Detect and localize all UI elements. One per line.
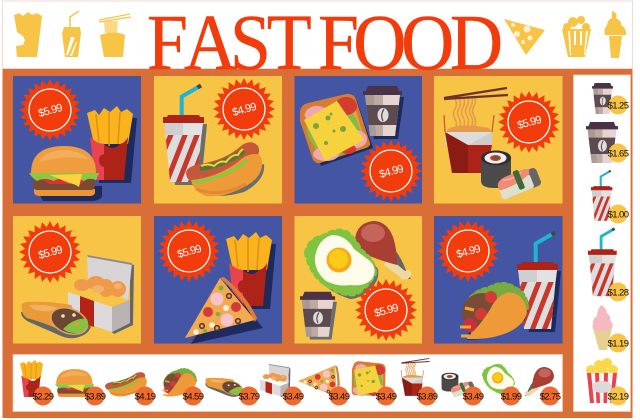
price: large drink: $1.28: [608, 288, 629, 298]
large coffee: [586, 122, 620, 165]
panel: noodles and sushi: [434, 76, 562, 204]
panel: burger and fries: [13, 76, 141, 204]
drumstick: [355, 221, 411, 280]
price badge: $4.99: [455, 243, 482, 261]
sushi: [481, 150, 542, 200]
panel: drink and hot dog: [153, 76, 282, 204]
price badge: $4.99: [378, 163, 405, 181]
price: sandwich: $3.49: [376, 392, 397, 402]
price: noodles: $3.89: [417, 392, 438, 402]
coffee: [363, 86, 404, 139]
price: burger: [85, 386, 106, 406]
price: large drink: [608, 282, 629, 302]
popcorn: [586, 358, 618, 403]
price: taco: [183, 386, 204, 406]
ice cream: [592, 305, 613, 350]
price: pizza: [329, 386, 350, 406]
taco: [460, 284, 529, 340]
burger: [29, 146, 102, 201]
panel: fries and pizza: [154, 216, 282, 344]
coffee: [300, 292, 337, 340]
panel: egg, chicken leg and coffee: [294, 216, 422, 344]
price badge: $4.99: [231, 101, 258, 119]
icon: noodle box silhouette: [99, 14, 131, 57]
price: drumstick: $2.75: [540, 392, 561, 402]
price: egg: [501, 386, 522, 406]
price: pizza: $3.49: [329, 392, 350, 402]
price: chicken: [283, 386, 304, 406]
small coffee: [592, 83, 614, 116]
header rule: [2, 1, 632, 68]
price: sandwich: [376, 386, 397, 406]
panel: bottom menu: [13, 353, 562, 412]
noodles: [401, 358, 430, 396]
hot dog: [186, 142, 264, 196]
title: FASTFOOD: [147, 0, 503, 87]
pizza: [185, 277, 263, 344]
price badge: $5.99: [176, 243, 203, 261]
price: small drink: $1.00: [608, 210, 629, 220]
panel: wrap and chicken: [13, 216, 141, 344]
price: chicken: $3.49: [283, 392, 304, 402]
price: wrap: $3.79: [239, 392, 260, 402]
panel: side menu: [574, 75, 630, 412]
price: noodles: [417, 386, 438, 406]
wrap: [205, 378, 245, 398]
price: ice cream: $1.19: [608, 338, 629, 350]
price: drumstick: [540, 386, 561, 406]
price: popcorn: $2.19: [608, 392, 629, 402]
fried egg: [483, 365, 515, 395]
drink: [153, 86, 211, 186]
large drink: [581, 229, 622, 299]
icon: soft drink silhouette: [62, 11, 81, 57]
price: wrap: [239, 386, 260, 406]
price: ice cream: [608, 334, 629, 352]
wrap: [21, 302, 92, 340]
price: small coffee: $1.25: [608, 100, 629, 112]
noodles: [444, 88, 508, 173]
panel: sandwich and coffee: [294, 76, 422, 204]
price: taco: $4.59: [183, 392, 204, 402]
sushi: [442, 373, 476, 398]
price: hot dog: [135, 386, 156, 406]
icon: popcorn silhouette: [562, 16, 591, 57]
sandwich: [300, 94, 373, 166]
price badge: $5.99: [37, 244, 64, 262]
small drink: [586, 171, 616, 223]
price: fries: $2.29: [33, 392, 54, 402]
chicken box: [260, 364, 290, 397]
icon: pizza silhouette: [504, 19, 545, 55]
fried egg: [307, 232, 378, 299]
price: egg: $1.99: [501, 392, 522, 402]
pizza: [296, 353, 355, 411]
chicken box: [68, 255, 134, 334]
icon: ice cream silhouette: [604, 11, 626, 58]
price: large coffee: $1.65: [608, 148, 629, 160]
panel: taco and drink: [434, 216, 565, 344]
price badge: $5.99: [373, 302, 400, 320]
drink: [507, 232, 565, 333]
fries: [20, 360, 45, 398]
drumstick: [525, 367, 554, 396]
taco: [162, 369, 197, 397]
price: large coffee: [608, 144, 629, 162]
price badge: $5.99: [516, 114, 543, 132]
price: small coffee: [608, 96, 629, 114]
price badge: $5.99: [37, 102, 64, 120]
price: small drink: [608, 204, 629, 224]
price: burger: $3.89: [85, 392, 106, 402]
price: popcorn: [608, 386, 629, 406]
burger: [55, 369, 96, 400]
price: sushi: $3.49: [463, 392, 484, 402]
price: fries: [33, 386, 54, 406]
price: sushi: [463, 386, 484, 406]
price: hot dog: $4.19: [135, 392, 156, 402]
icon: fries silhouette: [14, 12, 42, 57]
hot dog: [105, 372, 148, 396]
sandwich: [344, 355, 396, 407]
fries: [226, 232, 276, 309]
fries: [87, 106, 137, 183]
